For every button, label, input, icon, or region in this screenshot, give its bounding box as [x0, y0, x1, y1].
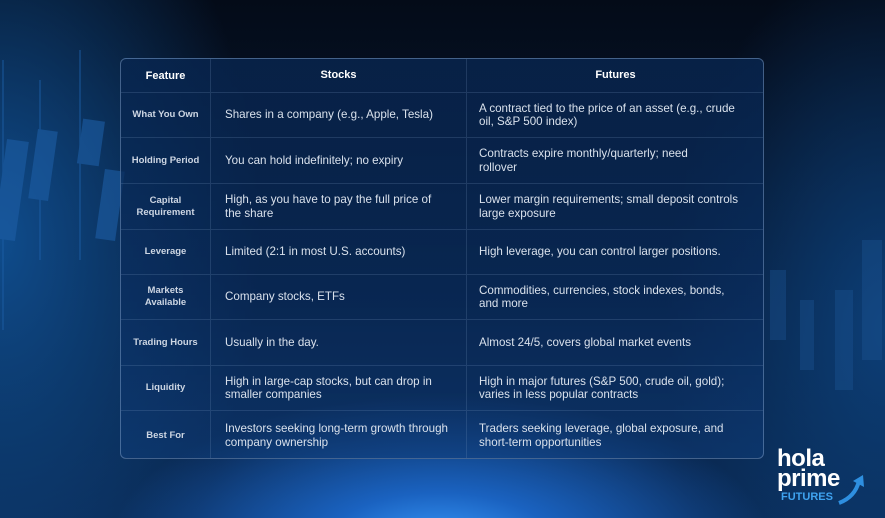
row: markets available: Available	[145, 297, 186, 308]
row: markets available: Markets	[148, 285, 183, 296]
row: liquidity: varies in less popular contracts	[479, 388, 638, 401]
row: liquidity: smaller companies	[225, 388, 322, 401]
row: trading hours	[121, 319, 765, 365]
header row: Stocks	[320, 69, 357, 81]
row: what you own: Shares in a company (e.g., Apple, Tesla)	[225, 108, 433, 121]
header row	[146, 59, 636, 92]
row: capital requirement: large exposure	[479, 206, 556, 220]
row: what you own: A contract tied to the price of an asset (e.g., crude	[479, 102, 735, 114]
row: leverage: High leverage, you can control larger positions.	[479, 245, 721, 258]
row: markets available: Commodities, currencies, stock indexes, bonds,	[479, 284, 725, 296]
row: what you own: What You Own	[132, 109, 199, 120]
row: capital requirement: Capital	[150, 194, 181, 206]
row: liquidity: High in major futures (S&P 500, crude oil, gold);	[479, 374, 724, 388]
row: best for: company ownership	[225, 436, 328, 448]
row: capital requirement: the share	[225, 206, 273, 220]
header row: Futures	[595, 69, 636, 81]
icon: arrow	[838, 475, 864, 505]
logo: hola prime futures: prime	[777, 465, 840, 492]
row: best for	[121, 410, 765, 460]
header row: Feature	[146, 70, 185, 82]
row: capital requirement	[121, 183, 765, 229]
row: capital requirement: High, as you have to pay the full price of	[225, 193, 431, 206]
row: liquidity: Liquidity	[146, 382, 185, 393]
row: what you own	[121, 92, 765, 137]
row: holding period: Contracts expire monthly/quarterly; need	[479, 147, 688, 160]
row: trading hours: Trading Hours	[133, 336, 198, 348]
logo: hola prime futures: FUTURES	[781, 491, 833, 503]
row: capital requirement: Lower margin requirements; small deposit controls	[479, 193, 738, 206]
row: best for: Traders seeking leverage, global exposure, and	[479, 422, 723, 435]
row: markets available: Company stocks, ETFs	[225, 290, 345, 303]
row: leverage: Leverage	[145, 246, 186, 257]
row: markets available: and more	[479, 297, 528, 310]
row: trading hours: Usually in the day.	[225, 336, 319, 349]
row: markets available	[121, 274, 765, 319]
row: holding period	[121, 137, 765, 183]
row: trading hours: Almost 24/5, covers global market events	[479, 336, 691, 349]
row: holding period: Holding Period	[132, 154, 199, 166]
logo: hola prime futures	[777, 445, 864, 505]
row: holding period: You can hold indefinitely; no expiry	[225, 154, 403, 167]
logo: hola prime futures: hola	[777, 445, 824, 472]
row: leverage: Limited (2:1 in most U.S. accounts)	[225, 245, 405, 258]
row: leverage	[121, 229, 765, 274]
row: liquidity	[121, 365, 765, 410]
comparison table	[120, 58, 764, 459]
row: capital requirement: Requirement	[136, 206, 195, 218]
row: best for: Best For	[146, 430, 185, 440]
row: best for: short-term opportunities	[479, 436, 601, 448]
row: holding period: rollover	[479, 160, 517, 174]
row: liquidity: High in large-cap stocks, but can drop in	[225, 374, 432, 388]
row: best for: Investors seeking long-term growth through	[225, 422, 448, 435]
row: what you own: oil, S&P 500 index)	[479, 115, 577, 128]
